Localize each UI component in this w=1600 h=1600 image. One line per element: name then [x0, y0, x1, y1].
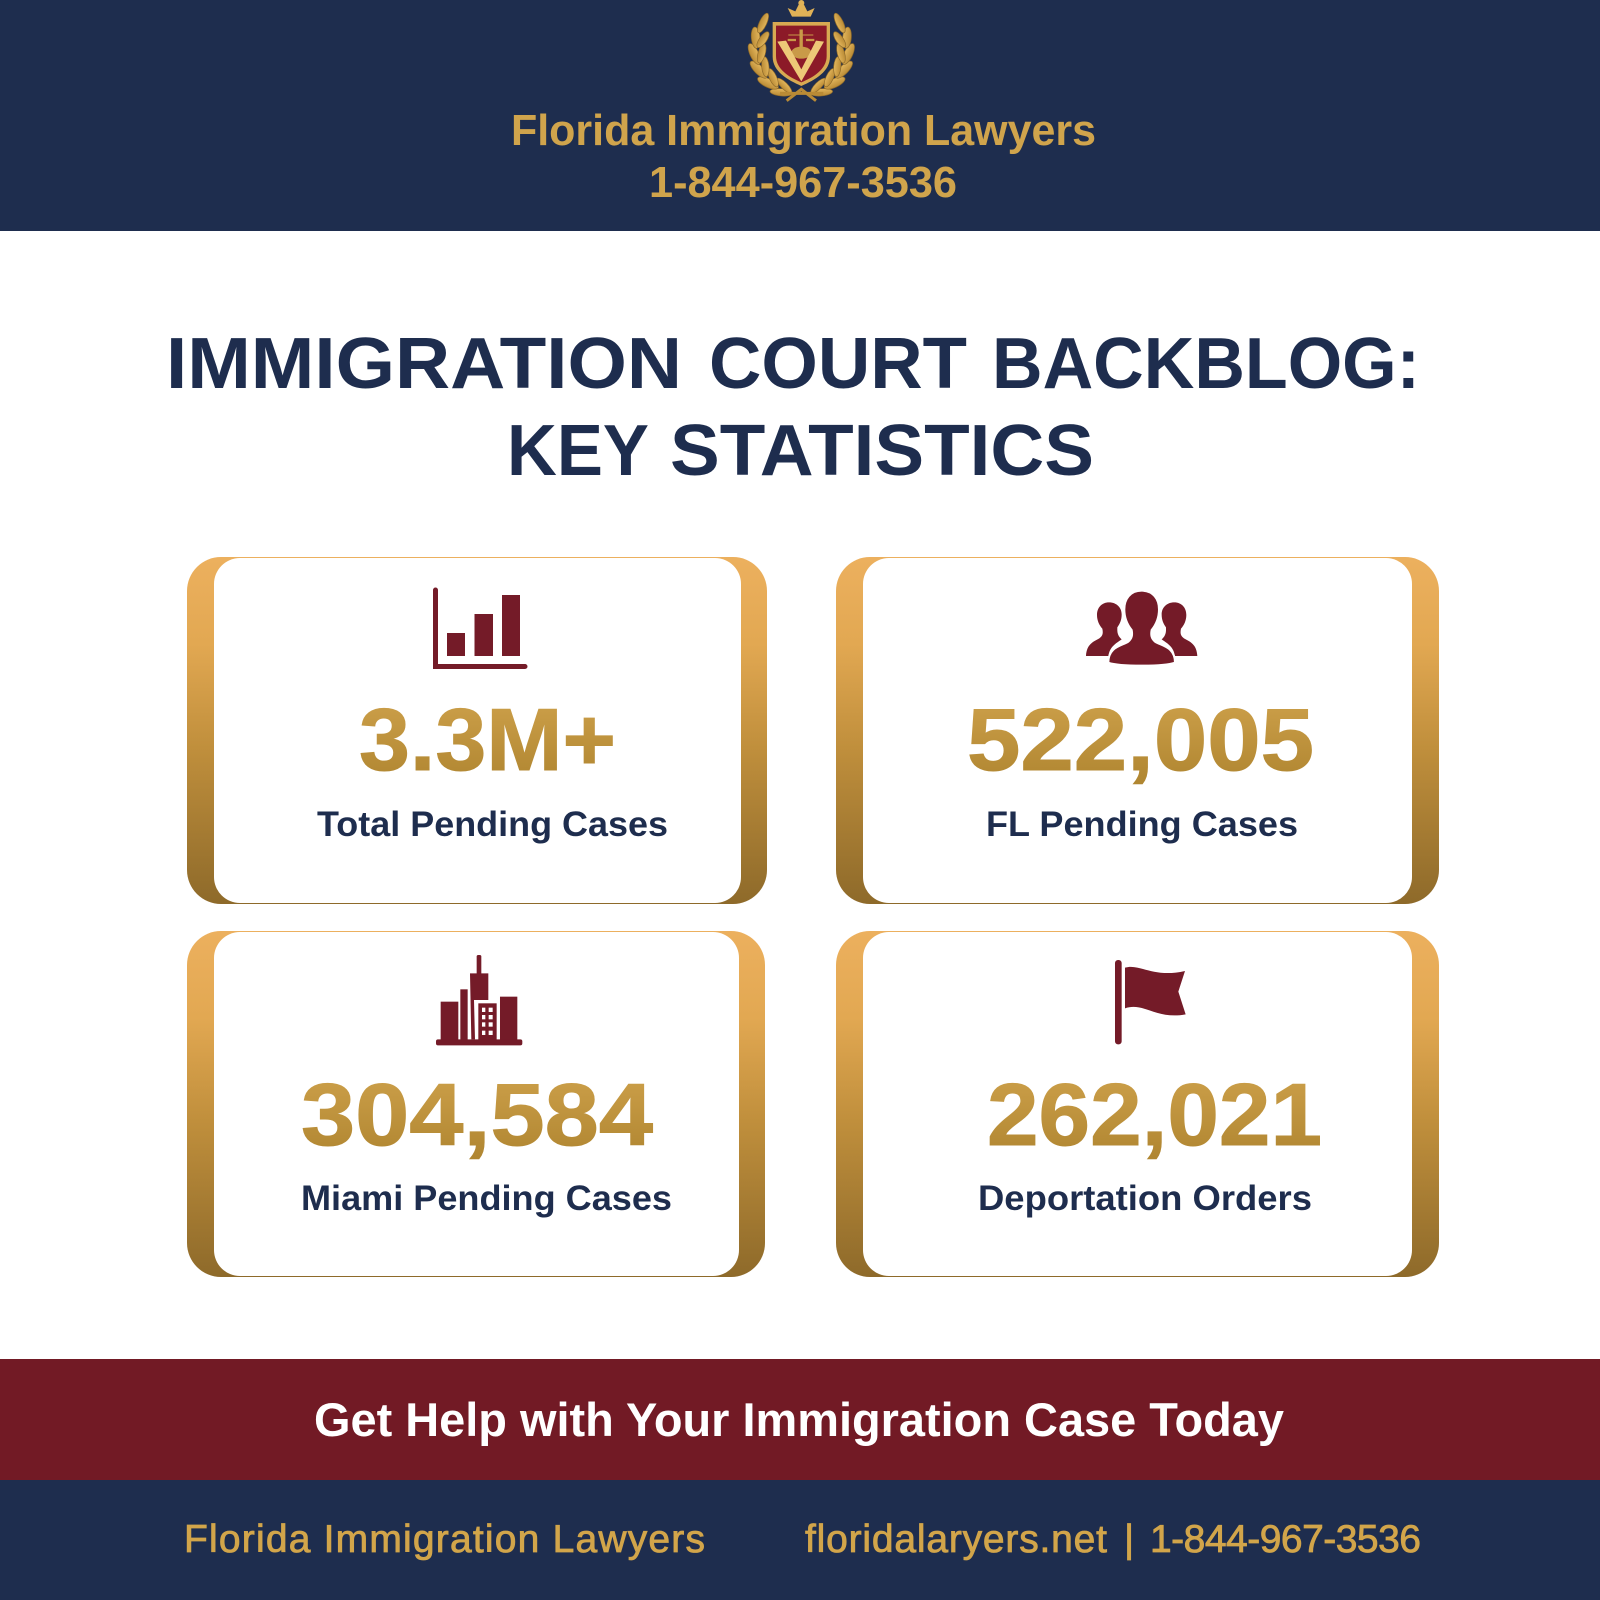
- panel: total pending cases: [187, 557, 767, 904]
- label: Miami Pending Cases: [301, 1179, 672, 1218]
- title: BACKBLOG:: [992, 324, 1420, 404]
- shield: [773, 22, 830, 86]
- icon: city skyline: [436, 955, 522, 1045]
- panel: Miami pending cases: [187, 931, 765, 1277]
- panel: deportation orders: [836, 931, 1439, 1277]
- icon: flag: [1115, 960, 1186, 1044]
- icon: people group: [1086, 591, 1197, 666]
- footer contact: |: [1124, 1518, 1134, 1561]
- title: KEY: [507, 411, 649, 491]
- statistic: 522,005: [967, 690, 1314, 789]
- icon: bar chart: [433, 588, 528, 669]
- V mark: [777, 41, 824, 81]
- firm name: Florida Immigration Lawyers: [511, 106, 1096, 155]
- statistic: 262,021: [987, 1065, 1322, 1164]
- crown: [788, 0, 815, 17]
- footer firm name: Florida Immigration Lawyers: [184, 1518, 705, 1561]
- phone number: 1-844-967-3536: [649, 158, 957, 207]
- label: Total Pending Cases: [317, 805, 668, 844]
- call to action band: Get Help with Your Immigration Case Today: [314, 1393, 1284, 1446]
- label: FL Pending Cases: [986, 805, 1298, 844]
- footer band: [0, 1480, 1600, 1600]
- footer contact: [805, 1518, 1421, 1561]
- wreath left: [746, 12, 794, 97]
- scales and sword: [788, 30, 813, 50]
- label: Deportation Orders: [978, 1179, 1312, 1218]
- call to action band: [0, 1359, 1600, 1480]
- title: STATISTICS: [670, 411, 1094, 491]
- wreath right: [809, 12, 857, 97]
- header band: [0, 0, 1600, 231]
- icon: law firm crest logo: [746, 0, 857, 101]
- title: IMMIGRATION: [166, 324, 682, 404]
- footer contact: floridalaryers.net: [805, 1518, 1107, 1561]
- footer contact: 1-844-967-3536: [1150, 1518, 1421, 1561]
- title: [166, 324, 1420, 491]
- ribbon: [780, 89, 823, 101]
- statistic: 304,584: [301, 1065, 653, 1164]
- panel: FL pending cases: [836, 557, 1439, 904]
- statistic: 3.3M+: [359, 690, 616, 789]
- title: COURT: [709, 324, 967, 404]
